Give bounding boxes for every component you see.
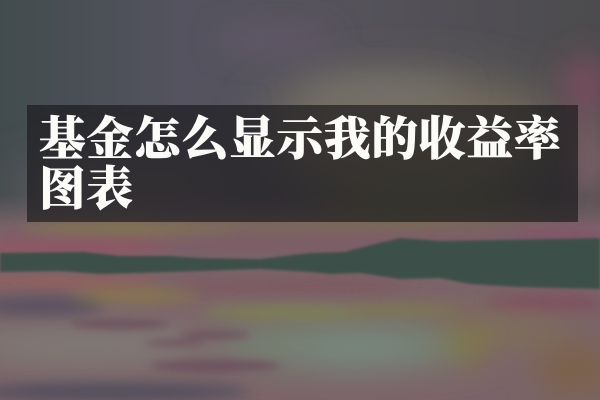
dark treeline and reflection bbox=[0, 238, 600, 289]
reflected clouds bbox=[70, 319, 280, 372]
sunset bands bbox=[0, 223, 600, 312]
yellow arc bbox=[0, 291, 460, 400]
sky glow bbox=[10, 80, 560, 223]
title: 基金怎么显示我的收益率图表 bbox=[39, 102, 562, 219]
title banner bbox=[27, 105, 578, 222]
lower reflection bbox=[0, 319, 600, 396]
